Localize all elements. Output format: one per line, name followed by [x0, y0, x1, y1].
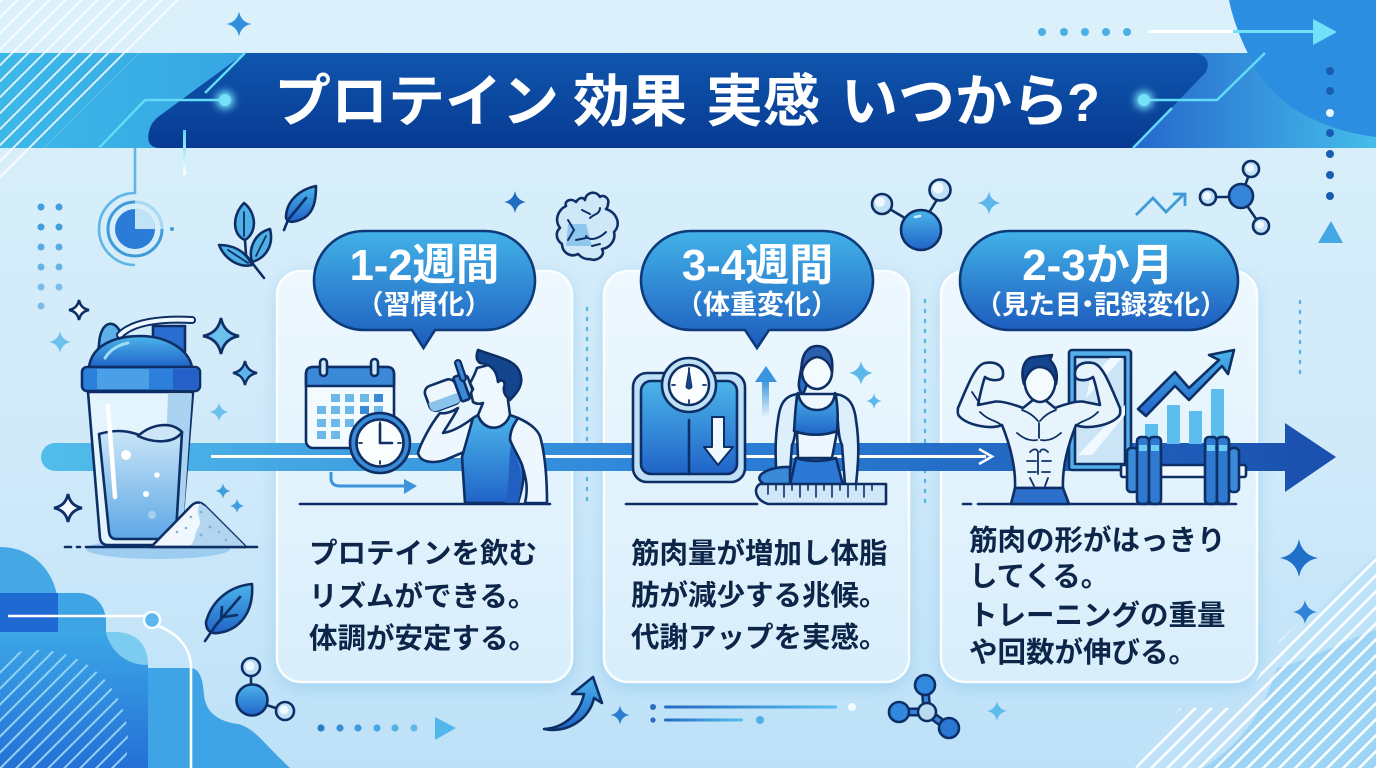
text: card 1 body: リズムができる。 [309, 580, 536, 613]
panel: 3-4 weeks [604, 271, 909, 682]
dotted dividers [587, 300, 1300, 504]
bubble: 2-3か月: 2-3か月 [1022, 241, 1174, 290]
woman with measuring tape [626, 346, 886, 504]
text: card 2 body: 肪が減少する兆候。 [631, 579, 888, 612]
title: いつから [841, 70, 1069, 134]
bubble: 1-2週間 [314, 231, 535, 348]
text: card 3 body: してくる。 [969, 561, 1109, 593]
bubble: 1-2週間: 1-2週間 [350, 242, 499, 290]
icon: leaf branch [219, 203, 271, 278]
title: 実感 [706, 70, 820, 134]
person drinking [300, 350, 550, 504]
vertical dots right [1326, 67, 1334, 200]
bottom-left blobs [0, 547, 290, 768]
circuit lines in band [99, 53, 1265, 148]
curved up arrow [544, 677, 602, 730]
bubble: 3-4週間 [641, 231, 873, 348]
text: card 1 body: プロテインを飲む [309, 538, 537, 570]
icon: protein cluster [557, 193, 618, 260]
top-left diagonal stripes [0, 0, 192, 192]
text: card 3 body: や回数が伸びる。 [969, 636, 1197, 669]
bubble: 2-3か月 [960, 231, 1238, 330]
bottom dots and triangle [317, 717, 456, 740]
icon: molecule bottom center [889, 675, 959, 738]
bubble: 3-4週間: （体重変化） [676, 290, 838, 320]
timeline arrow [41, 423, 1336, 492]
icon: trend arrow small [1136, 194, 1185, 215]
panel: 2-3 months [941, 271, 1257, 682]
muscular man [958, 355, 1120, 504]
icon: mirror [1069, 350, 1131, 470]
text: card 2 body: 代謝アップを実感。 [631, 622, 888, 654]
icon: weight scale [633, 358, 745, 482]
icon: molecule bottom left [236, 658, 294, 720]
line accents [650, 703, 856, 724]
icon: calendar and clock [306, 359, 410, 473]
up arrow [755, 366, 777, 418]
title: 効果 [573, 70, 687, 134]
text: card 1 body: 体調が安定する。 [309, 622, 537, 655]
icon: dumbbell [963, 437, 1246, 504]
title: ? [1067, 73, 1100, 133]
sparkles near woman [849, 361, 882, 408]
title: プロテイン [274, 70, 559, 134]
target icon [99, 148, 174, 265]
icon: molecule top right [1200, 161, 1269, 234]
text: card 3 body: トレーニングの重量 [969, 599, 1226, 632]
icon: shaker bottle [82, 320, 230, 559]
card shadows [277, 275, 1257, 687]
sparkle set [226, 12, 1318, 724]
top-right dots and arrow [1038, 19, 1337, 45]
bubble: 1-2週間: （習慣化） [356, 290, 492, 320]
panel: 1-2 weeks [277, 271, 572, 682]
bar chart [1145, 389, 1224, 445]
trend arrow [1138, 350, 1234, 416]
dot grid left [38, 204, 62, 310]
top-right corner blob [1229, 0, 1376, 137]
bottom-right stripes [1135, 552, 1376, 768]
icon: bottom leaf [205, 584, 252, 641]
text: card 2 body: 筋肉量が増加し体脂 [631, 537, 888, 570]
text: card 3 body: 筋肉の形がはっきり [969, 524, 1226, 557]
icon: molecule top center [872, 180, 950, 250]
sparkles around shaker [49, 300, 257, 522]
small arrow [331, 472, 417, 494]
title band [0, 53, 1376, 148]
bubble: 2-3か月: （見た目・記録変化） [976, 290, 1226, 320]
triangle [1318, 221, 1343, 243]
icon: single leaf [284, 186, 316, 230]
bubble: 3-4週間: 3-4週間 [682, 241, 833, 290]
icon: protein powder [65, 502, 257, 547]
vertical glow line [183, 130, 186, 175]
